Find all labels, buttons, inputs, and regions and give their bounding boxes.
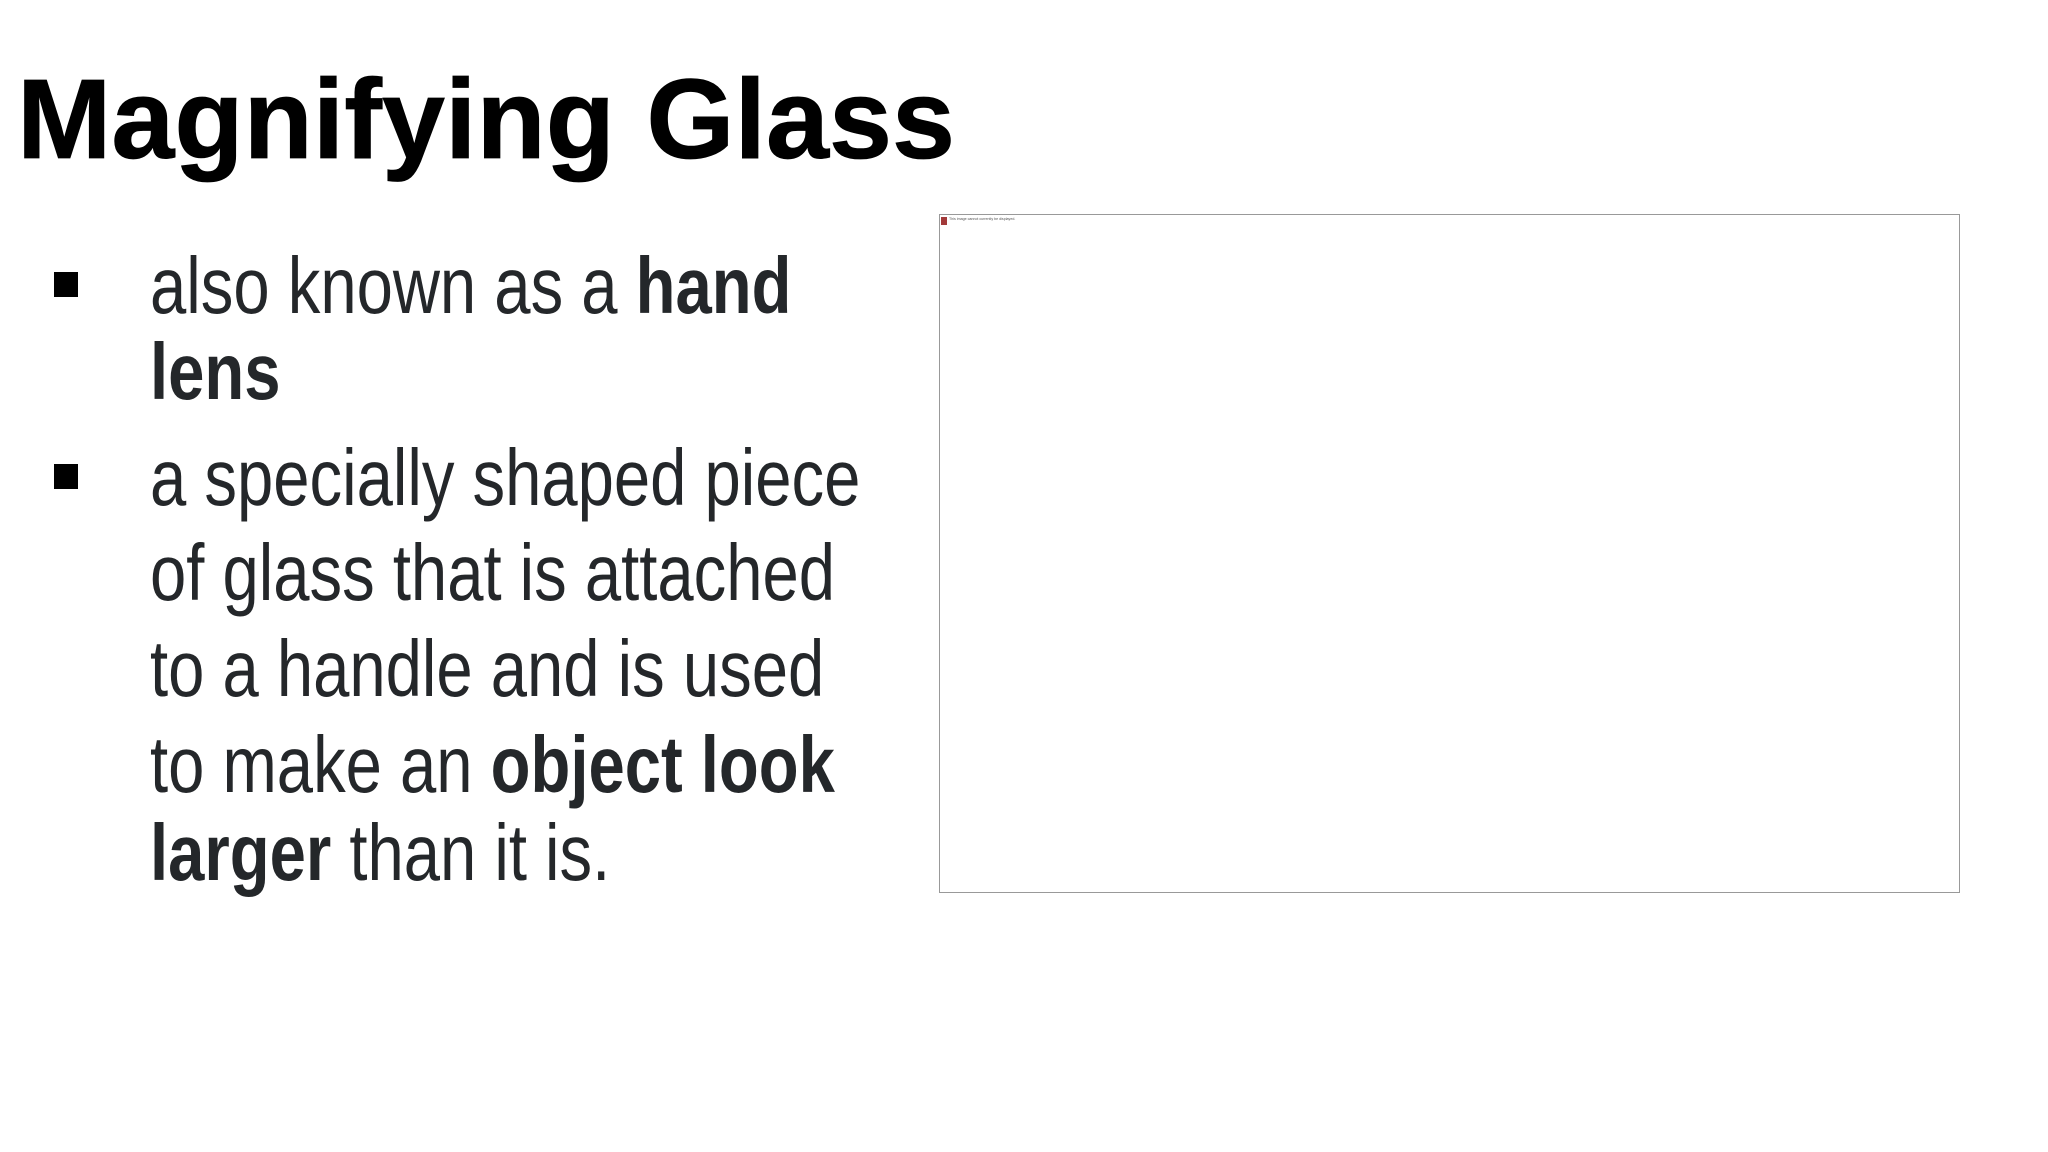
title: Magnifying Glass (17, 56, 955, 183)
text line 5: to a handle and is used (150, 624, 824, 713)
bullet text: definition (54, 433, 860, 897)
text line 4: of glass that is attached (150, 528, 835, 617)
placeholder message: This image cannot currently be displayed. (949, 217, 1015, 221)
text line 6: to make an object look (150, 720, 835, 809)
text line 7: larger than it is. (150, 808, 610, 897)
text line 3: a specially shaped piece (150, 433, 860, 522)
bullet text: also known as a hand lens (54, 241, 791, 416)
broken image icon (941, 217, 947, 225)
text line 1: also known as a hand (150, 241, 791, 330)
bullet marker 1 (54, 272, 78, 297)
text line 2: lens (150, 327, 280, 416)
image placeholder panel (939, 214, 1960, 893)
bullet marker 2 (54, 464, 78, 489)
